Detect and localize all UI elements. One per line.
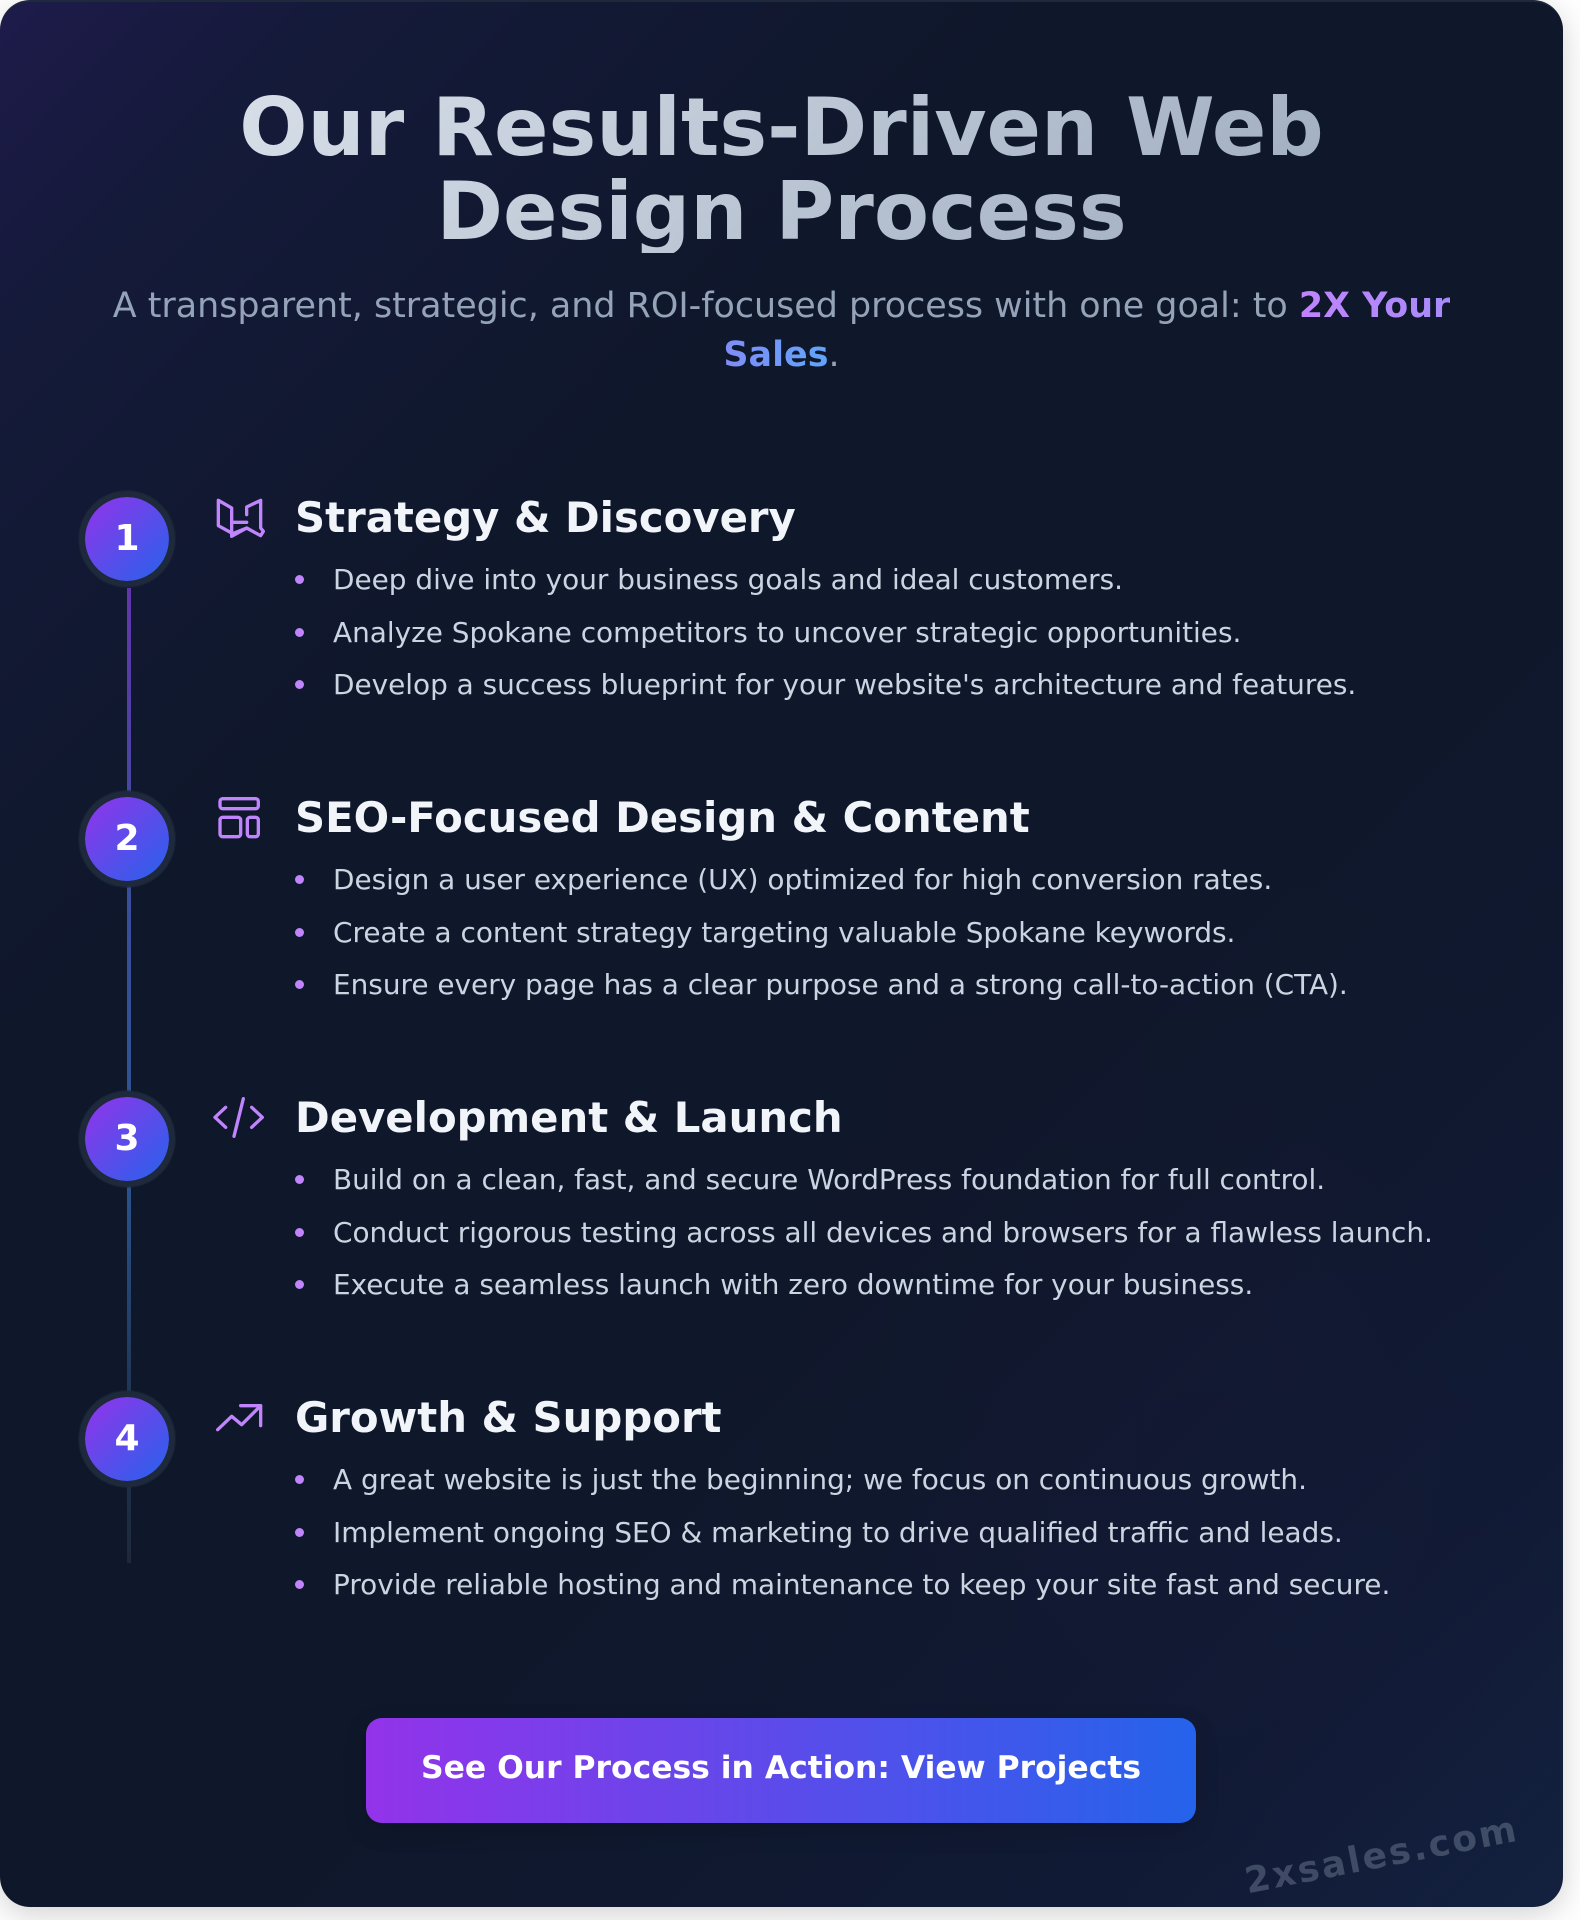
step 3 bullets <box>295 1163 1433 1301</box>
step 4 bullets <box>295 1463 1390 1601</box>
subtitle: Sales. <box>723 335 840 375</box>
bullet text: Develop a success blueprint for your website's architecture and features. <box>333 668 1356 701</box>
step 2 heading: SEO-Focused Design & Content <box>295 793 1030 842</box>
bullet text: Conduct rigorous testing across all devices and browsers for a flawless launch. <box>333 1216 1433 1248</box>
bullet text: Design a user experience (UX) optimized for high conversion rates. <box>333 863 1272 896</box>
bullet dot <box>294 628 304 636</box>
bullet text: Provide reliable hosting and maintenance to keep your site fast and secure. <box>333 1568 1390 1601</box>
bullet dot <box>294 1228 304 1236</box>
subtitle <box>113 286 1450 375</box>
bullet dot <box>294 1280 304 1289</box>
bullet dot <box>294 980 304 989</box>
step 1 number badge <box>79 491 175 587</box>
step 1 number badge: 1 <box>114 518 140 559</box>
bullet dot <box>294 928 304 936</box>
title <box>0 85 1563 253</box>
bullet text: Ensure every page has a clear purpose and a strong call-to-action (CTA). <box>333 968 1348 1001</box>
step 1 bullets <box>295 563 1356 701</box>
icon: trending up <box>216 1404 262 1432</box>
bullet dot <box>294 680 304 689</box>
step 1 heading: Strategy & Discovery <box>295 493 796 542</box>
call-to-action button <box>366 1718 1196 1822</box>
icon: code <box>213 1097 264 1138</box>
timeline connector line <box>127 588 131 1563</box>
watermark: 2xsales.com <box>1242 1809 1522 1902</box>
bullet text: Deep dive into your business goals and ideal customers. <box>333 563 1123 596</box>
bullet dot <box>294 875 304 884</box>
step 2 number badge <box>79 791 175 887</box>
call-to-action button: See Our Process in Action: View Projects <box>421 1750 1141 1786</box>
step 3 number badge <box>79 1091 175 1187</box>
icon: layout <box>218 797 260 838</box>
bullet dot <box>294 1475 304 1484</box>
step 3 number badge: 3 <box>114 1118 140 1159</box>
step 2 bullets <box>295 863 1348 1001</box>
step 4 number badge: 4 <box>114 1418 140 1459</box>
bullet dot <box>294 1175 304 1184</box>
bullet text: Build on a clean, fast, and secure WordPress foundation for full control. <box>333 1163 1325 1196</box>
icon: open book map <box>216 498 265 538</box>
bullet text: Create a content strategy targeting valuable Spokane keywords. <box>333 916 1235 948</box>
bullet text: Analyze Spokane competitors to uncover strategic opportunities. <box>333 616 1241 648</box>
bullet text: Implement ongoing SEO & marketing to drive qualified traffic and leads. <box>333 1516 1343 1548</box>
bullet dot <box>294 1528 304 1536</box>
bullet text: Execute a seamless launch with zero downtime for your business. <box>333 1268 1253 1301</box>
step 3 heading: Development & Launch <box>295 1093 843 1142</box>
subtitle: A transparent, strategic, and ROI-focused process with one goal: to 2X Your <box>113 286 1450 326</box>
bullet dot <box>294 575 304 584</box>
step 2 number badge: 2 <box>114 818 140 859</box>
step 4 number badge <box>79 1391 175 1487</box>
bullet dot <box>294 1580 304 1589</box>
step 4 heading: Growth & Support <box>295 1393 722 1442</box>
bullet text: A great website is just the beginning; we focus on continuous growth. <box>333 1463 1307 1496</box>
